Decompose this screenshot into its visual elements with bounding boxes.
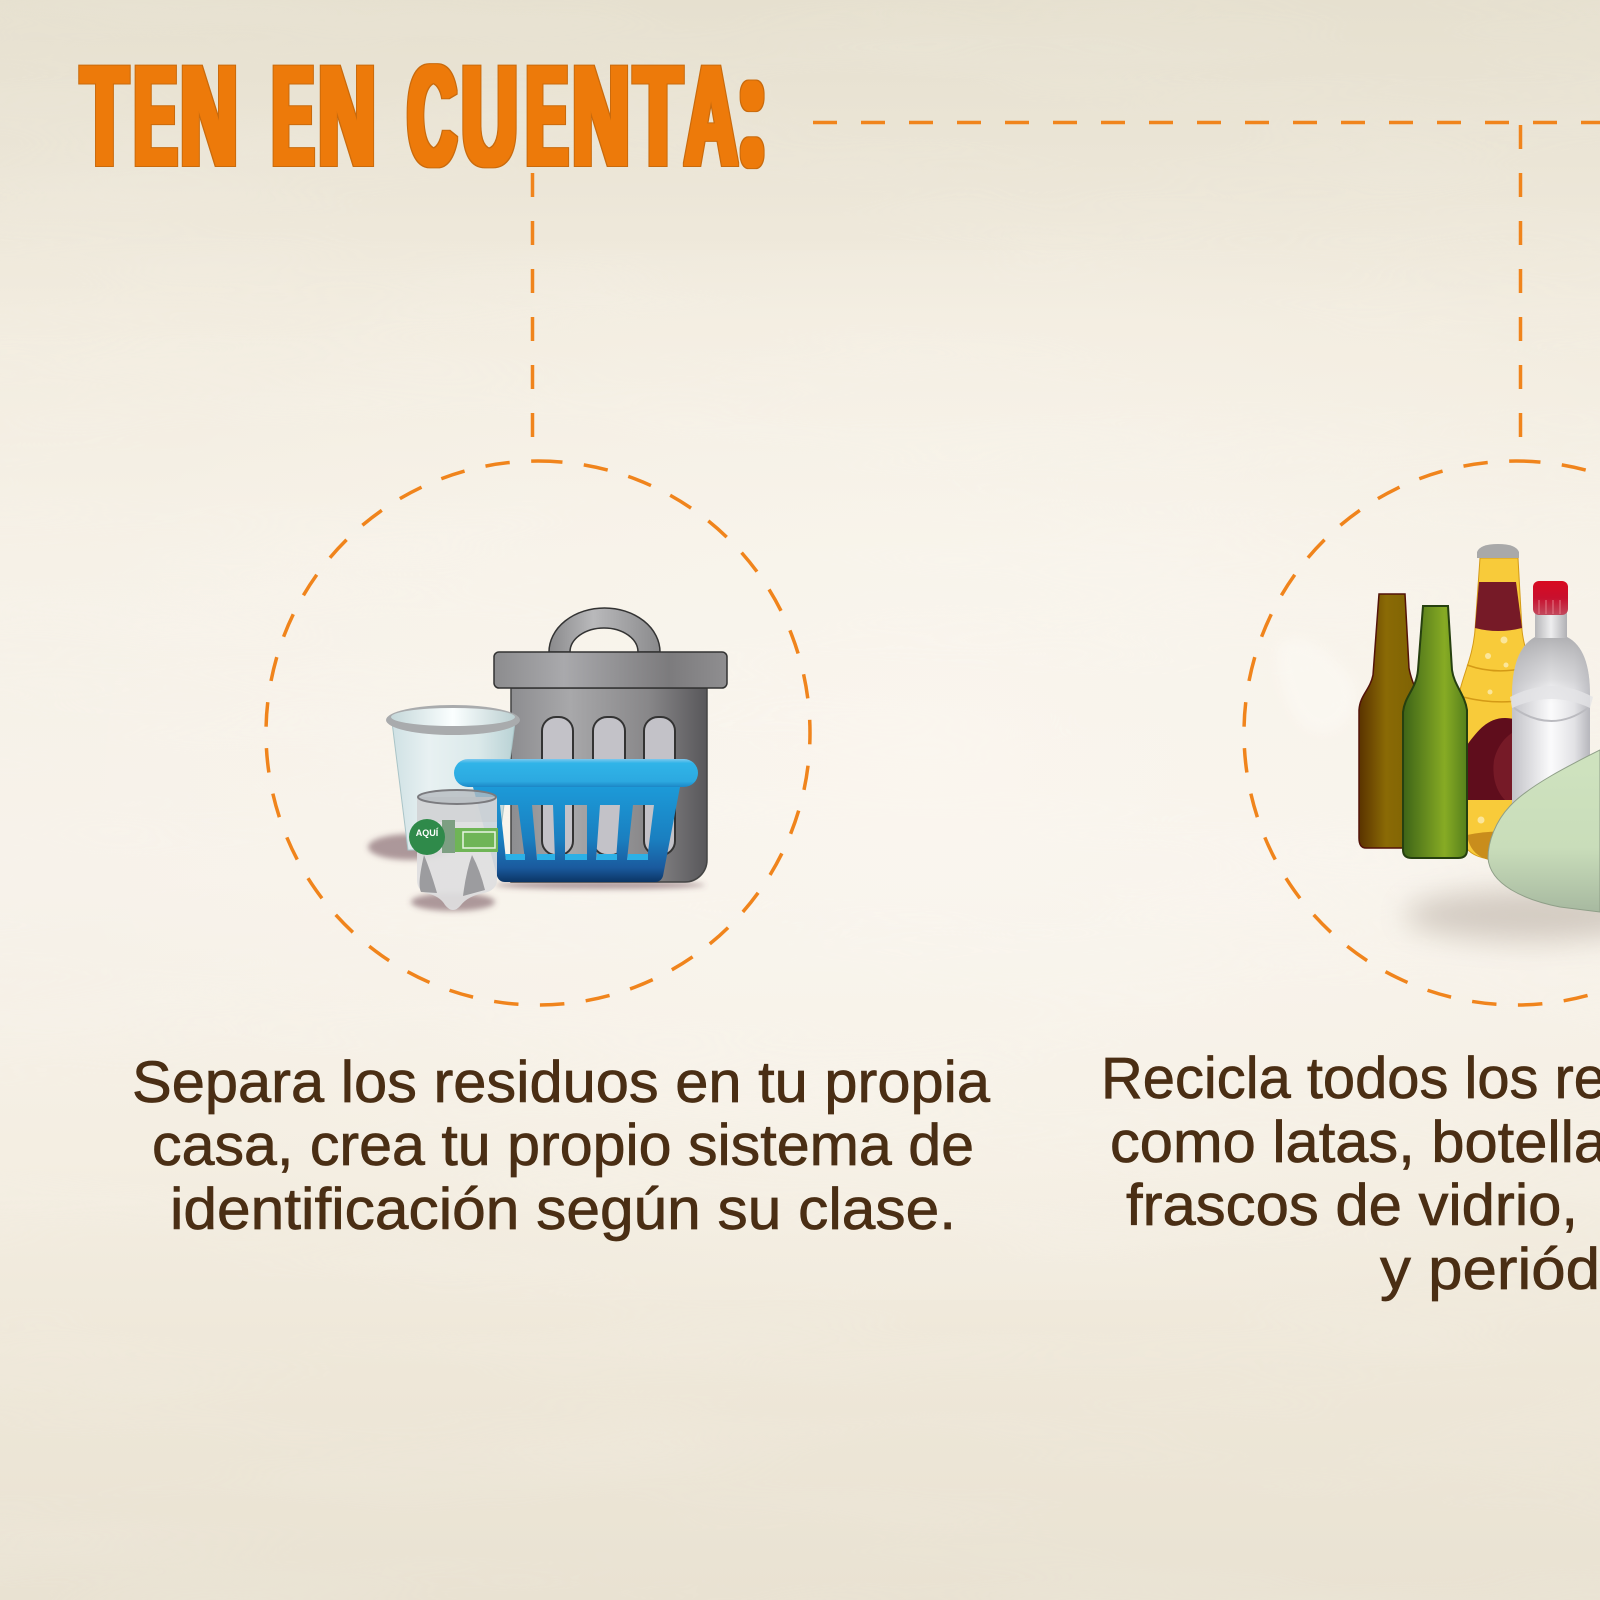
dashed circle 2 <box>1244 461 1600 1005</box>
text block: recicla: Recicla todos los re <box>1101 1046 1600 1111</box>
title: U <box>462 37 517 196</box>
text block: recicla: como latas, botella <box>1110 1110 1600 1175</box>
trash can lid <box>494 652 727 688</box>
green bottle <box>1403 606 1467 858</box>
glass rim <box>386 705 520 735</box>
cut bottle: AQUÍ <box>416 828 439 838</box>
icon: trash can, glass, basket and cut bottle <box>368 608 727 911</box>
basket window lower edges <box>505 854 648 860</box>
text block: recicla <box>1101 1046 1600 1302</box>
plastic bottle cap <box>1533 581 1568 615</box>
title: E <box>526 36 568 196</box>
title: N <box>318 36 375 196</box>
title: T <box>634 37 682 196</box>
text block: separa <box>132 1050 991 1242</box>
title: E <box>272 36 314 196</box>
recycling bag <box>1488 750 1600 912</box>
text block: separa: identificación según su clase. <box>170 1177 956 1242</box>
dashed connector: horizontal and verticals <box>532 122 1600 446</box>
bottle label <box>453 828 498 852</box>
title: E <box>134 37 177 196</box>
basket body <box>473 787 680 882</box>
brown bottle <box>1359 594 1419 848</box>
text block: separa: casa, crea tu propio sistema de <box>152 1113 974 1178</box>
title: T <box>81 36 128 196</box>
cut bottle <box>409 790 498 910</box>
text block: recicla: y periód <box>1380 1237 1600 1302</box>
plastic bottle <box>1510 581 1593 830</box>
dashed circle 1 <box>266 461 810 1005</box>
trash can slots <box>542 717 675 855</box>
title <box>81 0 767 208</box>
beer bottle <box>1460 544 1545 862</box>
bag shadow <box>1405 889 1600 941</box>
text block: separa: Separa los residuos en tu propia <box>132 1050 991 1115</box>
plastic bottle neck <box>1535 612 1567 638</box>
text block: recicla: frascos de vidrio, <box>1126 1173 1578 1238</box>
beer bottle neck label <box>1475 582 1522 631</box>
basket rim <box>454 759 698 787</box>
beer bottle cap <box>1477 544 1519 558</box>
title: C <box>408 36 456 196</box>
trash can handle <box>549 608 660 652</box>
title: N <box>180 36 237 196</box>
trash can body <box>511 688 707 882</box>
icon: bottles and recycling bag <box>1359 544 1600 941</box>
plastic glass <box>392 722 515 850</box>
beer bottle base <box>1467 832 1530 862</box>
title: A <box>685 36 737 197</box>
shadows <box>368 834 705 911</box>
title: N <box>572 36 629 196</box>
beer bottle main label <box>1467 718 1535 800</box>
